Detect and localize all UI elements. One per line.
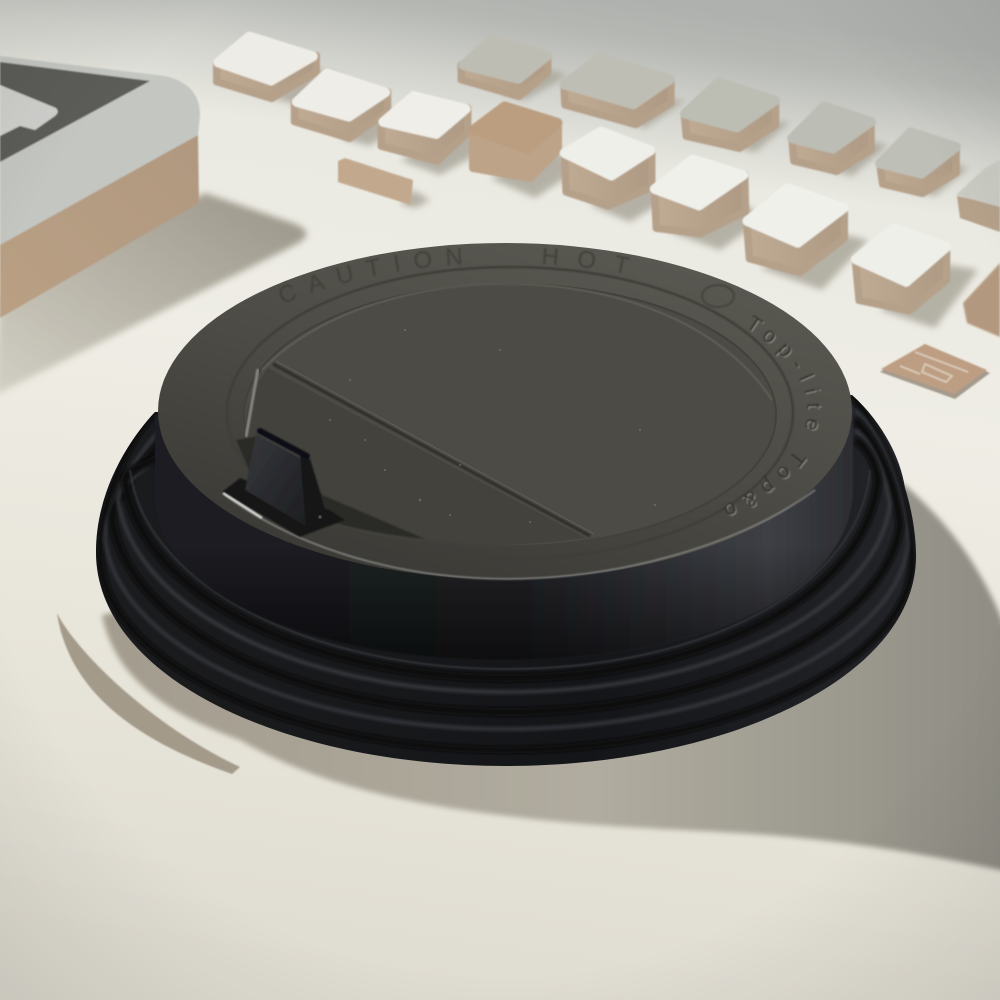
white tile 7	[855, 228, 947, 311]
tan tile	[473, 106, 558, 178]
tile shadows	[272, 70, 978, 328]
top rim highlight	[225, 490, 815, 579]
box side	[0, 135, 199, 318]
grey tile 3	[684, 82, 776, 148]
grey tile 4	[792, 106, 871, 171]
grey tile 2	[564, 58, 671, 124]
sip tab base	[222, 478, 345, 537]
flange base	[96, 395, 916, 766]
coffee cup lid	[96, 243, 916, 766]
white tile 3	[381, 96, 468, 161]
dome side wall	[155, 405, 853, 660]
grey tile 1	[461, 39, 548, 96]
tan curved sliver	[57, 613, 240, 774]
white tile 1	[217, 36, 316, 98]
right edge tile	[956, 160, 1000, 232]
white tile 6	[747, 188, 844, 273]
tab top edge	[260, 431, 307, 456]
lid speckles	[318, 329, 656, 523]
box dark inset	[0, 62, 150, 162]
cast shadow of lid	[102, 485, 1000, 872]
left box	[0, 56, 200, 318]
white tile 4	[564, 131, 652, 206]
small label card	[880, 344, 990, 399]
tab side	[300, 455, 328, 526]
box card	[0, 85, 58, 136]
score line highlight	[276, 361, 594, 534]
tab face	[245, 434, 306, 526]
recess highlight	[262, 284, 772, 400]
recycling mark	[702, 285, 734, 307]
tan edge tile	[963, 263, 1000, 337]
text body: Top-lite Top&o	[724, 315, 821, 516]
sip tab	[245, 431, 328, 526]
embossed text CAUTION: CAUTION	[280, 248, 462, 302]
white tile 5	[654, 159, 746, 234]
small tan bar	[338, 158, 413, 205]
embossed text right	[724, 315, 822, 516]
text highlight: Top-lite Top&o	[726, 317, 822, 516]
score line	[273, 364, 590, 536]
box top	[0, 56, 200, 245]
tab base highlight	[223, 493, 262, 518]
embossed text HOT: HOT	[543, 248, 630, 273]
top surface	[158, 243, 852, 579]
wedge shadow	[320, 494, 425, 539]
flange ridges	[100, 395, 912, 750]
cast shadow of left box	[0, 193, 306, 395]
keys grid	[217, 36, 1000, 337]
dark shadow beside slot	[236, 436, 258, 472]
lower-left darker segment	[245, 368, 586, 545]
sip slot	[246, 369, 258, 437]
grey tile 5	[880, 132, 956, 193]
inner recessed panel	[244, 284, 776, 546]
white tile 2	[294, 73, 388, 138]
dome lower shading	[155, 405, 853, 660]
outer groove	[227, 267, 793, 559]
